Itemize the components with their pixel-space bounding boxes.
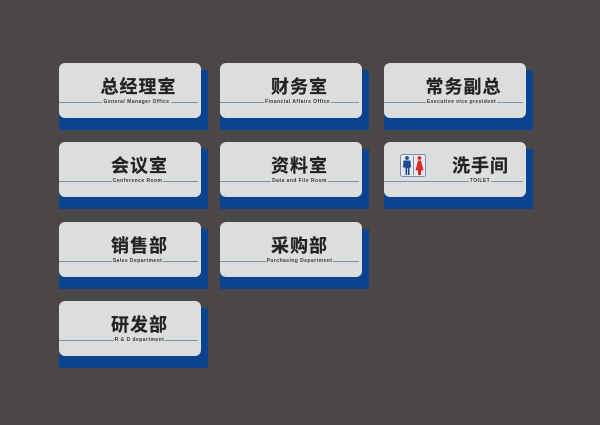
- sign: Executive vice president: [384, 63, 533, 130]
- heading: 财务室: 财务室: [271, 77, 328, 97]
- label: Executive vice president: Executive vice president: [427, 99, 496, 105]
- label: Conference Room: Conference Room: [113, 178, 162, 184]
- heading: 总经理室: 总经理室: [100, 77, 176, 97]
- heading: 会议室: 会议室: [111, 156, 168, 176]
- label: TOILET: TOILET: [470, 178, 490, 184]
- icon: restroom man and woman: [400, 154, 426, 177]
- label: General Manager Office: General Manager Office: [103, 99, 170, 105]
- sign: Financial Affairs Office: [220, 63, 369, 130]
- heading: 销售部: 销售部: [111, 236, 168, 256]
- sign: Toilet: [384, 142, 533, 209]
- label: Financial Affairs Office: Financial Affairs Office: [265, 99, 330, 105]
- sign: R & D department: [59, 301, 208, 368]
- label: R & D department: R & D department: [115, 337, 164, 343]
- sign: Purchasing Department: [220, 222, 369, 289]
- heading: 常务副总: 常务副总: [426, 77, 502, 97]
- sign: Data and File Room: [220, 142, 369, 209]
- heading: 研发部: 研发部: [111, 315, 168, 335]
- heading: 资料室: 资料室: [271, 156, 328, 176]
- sign: Conference Room: [59, 142, 208, 209]
- heading: 洗手间: 洗手间: [452, 156, 509, 176]
- label: Data and File Room: Data and File Room: [272, 178, 327, 184]
- heading: 采购部: 采购部: [271, 236, 328, 256]
- label: Purchasing Department: Purchasing Department: [267, 258, 332, 264]
- label: Sales Department: Sales Department: [113, 258, 162, 264]
- sign: General Manager Office: [59, 63, 208, 130]
- sign: Sales Department: [59, 222, 208, 289]
